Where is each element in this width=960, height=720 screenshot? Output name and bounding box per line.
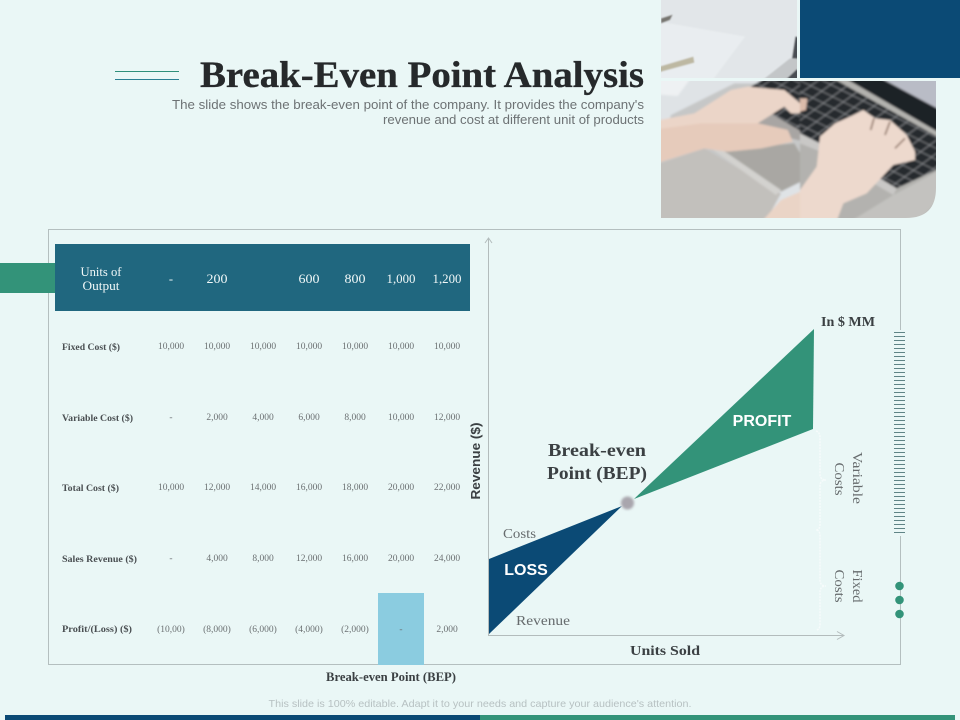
row: variable cost: 4,000 <box>252 413 274 423</box>
row: sales revenue <box>62 554 460 564</box>
row: sales revenue: 12,000 <box>296 554 322 564</box>
variable costs label: Variable <box>849 452 864 504</box>
dark blue block <box>800 0 960 78</box>
row: fixed cost: 10,000 <box>158 342 184 352</box>
row: variable cost: - <box>169 413 173 423</box>
revenue label: Revenue <box>516 614 570 629</box>
highlighted break-even cell <box>378 593 424 665</box>
row: total cost: 10,000 <box>158 483 184 493</box>
subtitle text: The slide shows the break-even point of the company. It provides the company's <box>172 98 644 112</box>
photo: notebook and laptop corner <box>661 0 797 78</box>
row: profit or loss: (4,000) <box>295 624 323 635</box>
footer bar <box>5 715 955 720</box>
break-even point label: Break-even <box>548 440 646 460</box>
row: variable cost: 2,000 <box>206 413 228 423</box>
table header: 1,200 <box>432 272 462 286</box>
row: fixed cost: Fixed Cost ($) <box>62 342 120 352</box>
row: variable cost: 10,000 <box>388 413 414 423</box>
break-even point label: Point (BEP) <box>547 463 647 484</box>
row: variable cost: 8,000 <box>344 413 366 423</box>
three green dots <box>895 582 904 618</box>
row: sales revenue: 8,000 <box>252 554 274 564</box>
row: fixed cost: 10,000 <box>204 342 230 352</box>
row: profit or loss: (2,000) <box>341 624 369 635</box>
x axis title: Units Sold <box>630 644 700 659</box>
row: total cost: 22,000 <box>434 483 460 493</box>
break-even point table caption: Break-even Point (BEP) <box>326 670 456 684</box>
row: total cost: 20,000 <box>388 483 414 493</box>
decorative lines beside title <box>115 71 179 80</box>
row: total cost: 14,000 <box>250 483 276 493</box>
break-even point label <box>547 440 647 484</box>
subtitle text <box>172 98 644 127</box>
fixed costs label: Fixed <box>849 570 864 602</box>
subtitle text: revenue and cost at different unit of products <box>383 113 644 127</box>
footer note: This slide is 100% editable. Adapt it to your needs and capture your audience's attention. <box>268 698 692 710</box>
row: profit or loss: - <box>399 625 403 635</box>
loss label: LOSS <box>504 562 548 579</box>
chart axes <box>485 238 844 640</box>
row: profit or loss: (6,000) <box>249 624 277 635</box>
row: sales revenue: 20,000 <box>388 554 414 564</box>
break-even marker <box>621 496 634 510</box>
table header: 200 <box>206 272 228 286</box>
row: variable cost: 12,000 <box>434 413 460 423</box>
variable costs label: Costs <box>831 462 846 496</box>
table header: 1,000 <box>386 272 416 286</box>
row: fixed cost: 10,000 <box>388 342 414 352</box>
cost brace <box>816 431 826 630</box>
table header: Output <box>82 279 120 293</box>
title: Break-Even Point Analysis <box>200 55 644 96</box>
table header: 800 <box>344 272 366 286</box>
profit wedge <box>634 329 814 499</box>
frame panel <box>48 230 900 664</box>
row: total cost: 18,000 <box>342 483 368 493</box>
row: fixed cost: 10,000 <box>296 342 322 352</box>
row: profit or loss: (8,000) <box>203 624 231 635</box>
row: total cost <box>62 483 460 493</box>
row: variable cost: 6,000 <box>298 413 320 423</box>
table header: - <box>169 272 173 286</box>
green accent bar <box>0 263 55 293</box>
profit label: PROFIT <box>733 413 792 430</box>
row: fixed cost <box>62 342 460 352</box>
row: profit or loss: Profit/(Loss) ($) <box>62 624 132 634</box>
row: fixed cost: 10,000 <box>342 342 368 352</box>
break-even chart <box>469 238 875 659</box>
variable costs label <box>831 452 864 504</box>
fixed costs label: Costs <box>831 570 846 602</box>
photo: hands typing on laptop <box>661 81 936 218</box>
row: profit or loss <box>62 624 458 635</box>
row: total cost: 16,000 <box>296 483 322 493</box>
row: sales revenue: 16,000 <box>342 554 368 564</box>
fixed costs label <box>831 570 864 602</box>
row: sales revenue: 4,000 <box>206 554 228 564</box>
row: fixed cost: 10,000 <box>250 342 276 352</box>
row: sales revenue: Sales Revenue ($) <box>62 554 137 564</box>
table header: Units of <box>80 265 122 279</box>
row: variable cost <box>62 413 460 423</box>
row: total cost: Total Cost ($) <box>62 483 119 493</box>
table header <box>55 244 470 311</box>
unit note: In $ MM <box>821 315 875 330</box>
row: sales revenue: 24,000 <box>434 554 460 564</box>
table header: 600 <box>298 272 320 286</box>
tick strip on frame <box>893 330 907 536</box>
row: fixed cost: 10,000 <box>434 342 460 352</box>
row: variable cost: Variable Cost ($) <box>62 413 133 423</box>
row: total cost: 12,000 <box>204 483 230 493</box>
row: sales revenue: - <box>169 554 173 564</box>
row: profit or loss: (10,00) <box>157 624 185 635</box>
table <box>55 244 470 665</box>
loss triangle <box>489 506 622 634</box>
y axis title: Revenue ($) <box>469 422 483 500</box>
costs label: Costs <box>503 527 536 542</box>
row: profit or loss: 2,000 <box>436 625 458 635</box>
